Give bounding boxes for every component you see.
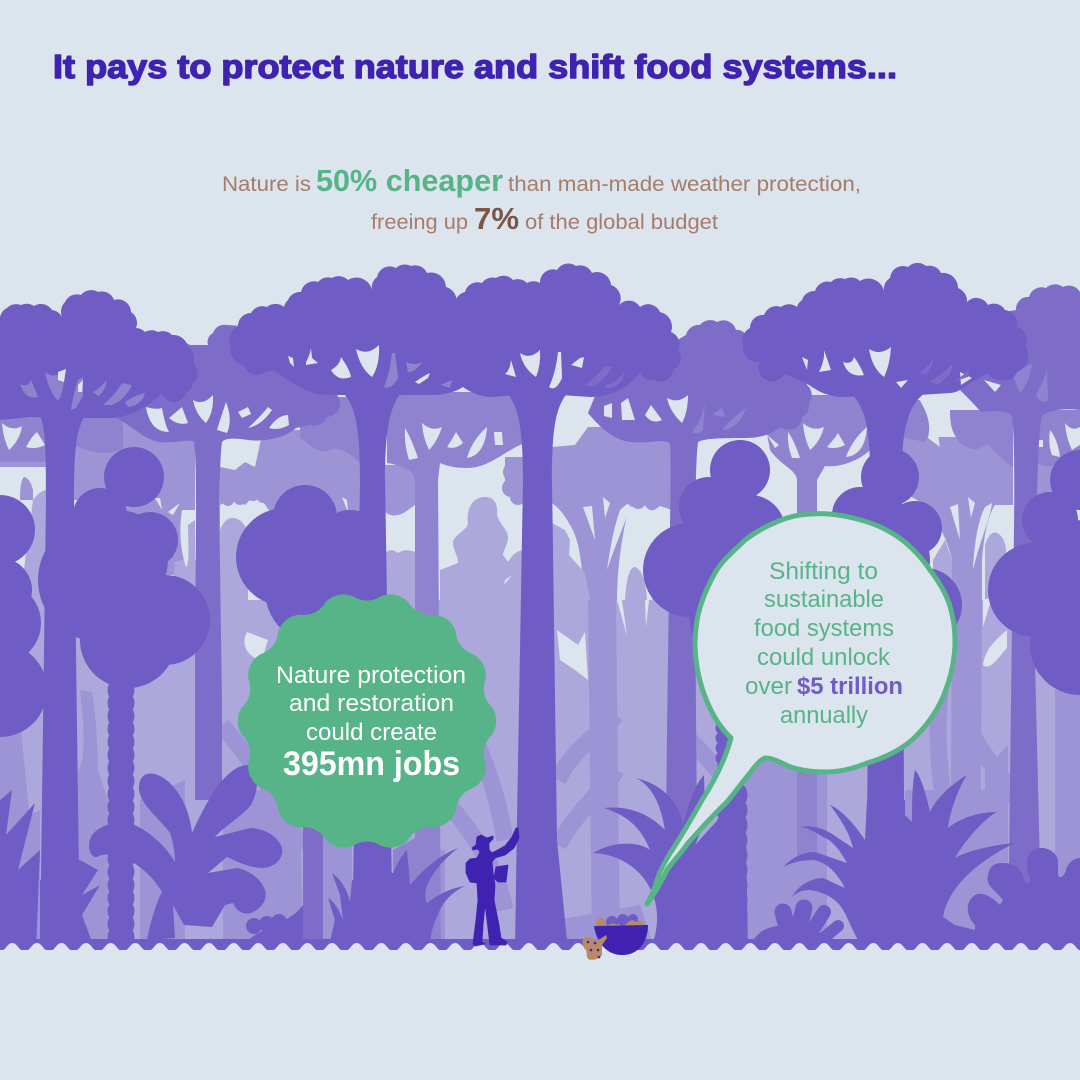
understory plants: [0, 765, 1080, 953]
forest illustration: [0, 263, 1080, 1080]
subtitle: nature is cheaper: freeing up: [371, 211, 468, 234]
beaded vines: [121, 690, 732, 948]
upper mid-tone masses behind the trees: [0, 415, 1053, 620]
subtitle: nature is cheaper: Nature is: [222, 173, 311, 196]
speech bubble: food systems: sustainable: [764, 586, 884, 613]
speech bubble: food systems: Shifting to: [769, 558, 878, 585]
canopy branch holes: [20, 345, 972, 410]
back canopy holes: [146, 363, 1048, 434]
sky slivers between branches: [73, 497, 1007, 680]
mid-light forest layer: [0, 600, 1080, 950]
subtitle: nature is cheaper: 7%: [474, 201, 519, 236]
speech bubble: food systems: [647, 514, 955, 904]
back canopy layer: [117, 284, 1080, 950]
lightest forest layer: [0, 490, 1080, 950]
green jobs badge: 395mn jobs: [283, 745, 460, 783]
food bowl and bananas: [583, 914, 648, 960]
subtitle: nature is cheaper: than man-made weather protection,: [508, 173, 861, 196]
mid forest layer holes: [2, 395, 1080, 460]
speech bubble: food systems: could unlock: [757, 644, 891, 671]
green jobs badge: [225, 579, 509, 863]
speech bubble: food systems: food systems: [754, 615, 894, 642]
green jobs badge: could create: [306, 719, 437, 746]
speech bubble: food systems: annually: [780, 702, 868, 729]
front canopy: centre trees crown: [229, 263, 681, 397]
mid forest layer: [0, 392, 1080, 950]
subtitle: nature is cheaper: of the global budget: [525, 211, 718, 234]
speech bubble: food systems: over: [745, 673, 792, 700]
explorer figure: [466, 828, 519, 946]
main tree trunks: [38, 390, 925, 950]
green jobs badge: Nature protection: [276, 662, 466, 689]
round-crowned trees: [0, 440, 1080, 737]
front canopy: left tree crown: [0, 290, 198, 420]
front canopy: right tree crown: [742, 263, 1028, 397]
title: It pays to protect nature and shift food systems...: [53, 48, 897, 85]
subtitle: nature is cheaper: [222, 163, 861, 236]
wavy ground edge: [0, 941, 1080, 1080]
subtitle: nature is cheaper: 50% cheaper: [316, 163, 503, 198]
speech bubble: food systems: $5 trillion: [797, 673, 903, 700]
green jobs badge: and restoration: [289, 690, 454, 717]
